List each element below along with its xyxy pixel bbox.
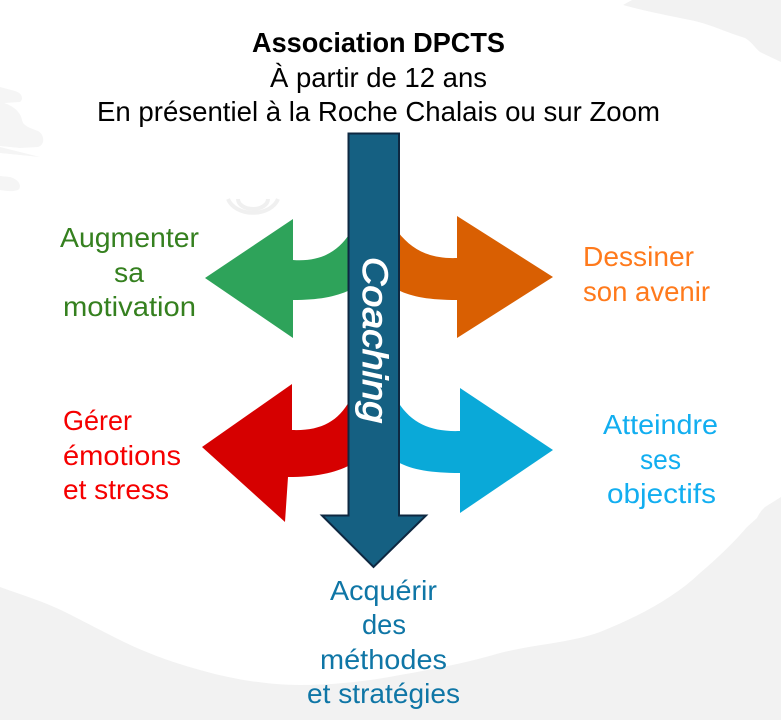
label: Acquérir des méthodes et stratégies: Acquérir bbox=[330, 575, 437, 606]
background: grey left lower splotch bbox=[0, 176, 20, 191]
label: Gérer émotions et stress bbox=[63, 405, 181, 505]
arrow: blue, right bbox=[398, 388, 553, 513]
background: grey left splotches bbox=[0, 87, 43, 148]
label: Augmenter sa motivation: Augmenter bbox=[60, 222, 199, 253]
label: Acquérir des méthodes et stratégies: des bbox=[362, 609, 406, 640]
label: Gérer émotions et stress: émotions bbox=[63, 440, 181, 471]
background: grey bottom sweep bbox=[0, 497, 781, 720]
label: Augmenter sa motivation: motivation bbox=[63, 291, 196, 322]
label: Atteindre ses objectifs: ses bbox=[640, 444, 681, 475]
title: Association DPCTS bbox=[252, 27, 505, 58]
label: Coaching on arrow: Coaching bbox=[355, 257, 394, 424]
arrow: orange, right bbox=[398, 216, 553, 338]
label: Atteindre ses objectifs: Atteindre bbox=[603, 409, 718, 440]
icon: faint swirl mark bbox=[228, 199, 278, 213]
label: Acquérir des méthodes et stratégies: et stratégies bbox=[307, 678, 460, 709]
label: Atteindre ses objectifs bbox=[603, 409, 718, 509]
subtitle: age: À partir de 12 ans bbox=[270, 62, 487, 93]
label: Dessiner son avenir: son avenir bbox=[583, 276, 710, 307]
background: grey top-right corner bbox=[623, 0, 781, 62]
arrow: green, left bbox=[205, 219, 350, 338]
label: Augmenter sa motivation: sa bbox=[114, 257, 145, 288]
label: Acquérir des méthodes et stratégies bbox=[307, 575, 460, 709]
subtitle: location: En présentiel à la Roche Chalais ou sur Zoom bbox=[97, 96, 660, 127]
label: Acquérir des méthodes et stratégies: méthodes bbox=[320, 644, 447, 675]
label: Augmenter sa motivation bbox=[60, 222, 199, 322]
label: Dessiner son avenir bbox=[583, 241, 710, 307]
arrow: red, left bbox=[202, 384, 350, 522]
arrow: main coaching arrow pointing down bbox=[322, 134, 426, 567]
label: Dessiner son avenir: Dessiner bbox=[583, 241, 694, 272]
label: Gérer émotions et stress: Gérer bbox=[63, 405, 132, 436]
background: grey left wedge bbox=[0, 147, 40, 157]
label: Atteindre ses objectifs: objectifs bbox=[607, 478, 716, 509]
label: Gérer émotions et stress: et stress bbox=[63, 474, 169, 505]
